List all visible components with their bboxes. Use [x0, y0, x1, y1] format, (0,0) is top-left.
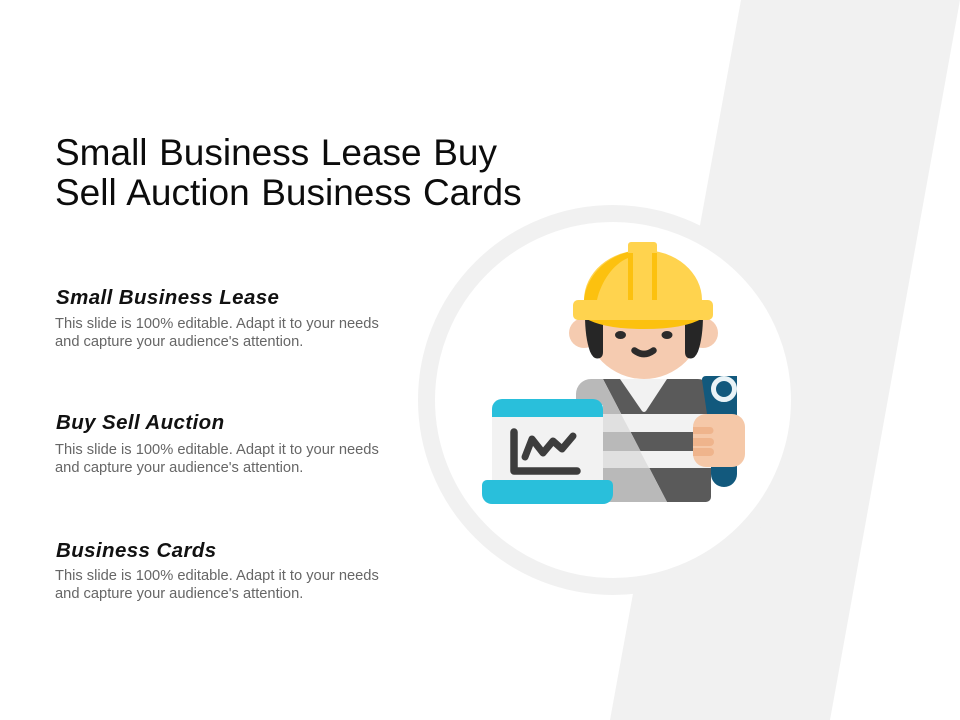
text block: buy sell auction: [55, 411, 379, 476]
face: [585, 315, 703, 379]
heading: Buy Sell Auction: [56, 411, 225, 434]
heading: Business Cards: [56, 539, 217, 562]
body text: This slide is 100% editable. Adapt it to your needs: [55, 442, 379, 458]
line chart: [514, 432, 577, 471]
body text: and capture your audience's attention.: [55, 334, 303, 350]
laptop: [482, 399, 613, 504]
ears: [569, 318, 718, 348]
smile: [634, 350, 654, 354]
body text: This slide is 100% editable. Adapt it to your needs: [55, 568, 379, 584]
title: Small Business Lease Buy: [55, 132, 497, 173]
body text: This slide is 100% editable. Adapt it to your needs: [55, 316, 379, 332]
hand: [693, 414, 745, 467]
text block: small business lease: [55, 286, 379, 350]
icon: construction worker with laptop: [482, 242, 745, 504]
torso: [576, 379, 711, 502]
eyes: [615, 331, 672, 339]
scroll: [702, 376, 737, 487]
body text: [55, 442, 379, 476]
hair: [585, 315, 703, 358]
body text: and capture your audience's attention.: [55, 586, 303, 602]
body text: [55, 568, 379, 602]
body text: [55, 316, 379, 350]
body text: and capture your audience's attention.: [55, 460, 303, 476]
title: [55, 132, 522, 213]
heading: Small Business Lease: [56, 286, 279, 309]
title: Sell Auction Business Cards: [55, 172, 522, 213]
helmet: [573, 242, 713, 329]
text block: business cards: [55, 539, 379, 602]
